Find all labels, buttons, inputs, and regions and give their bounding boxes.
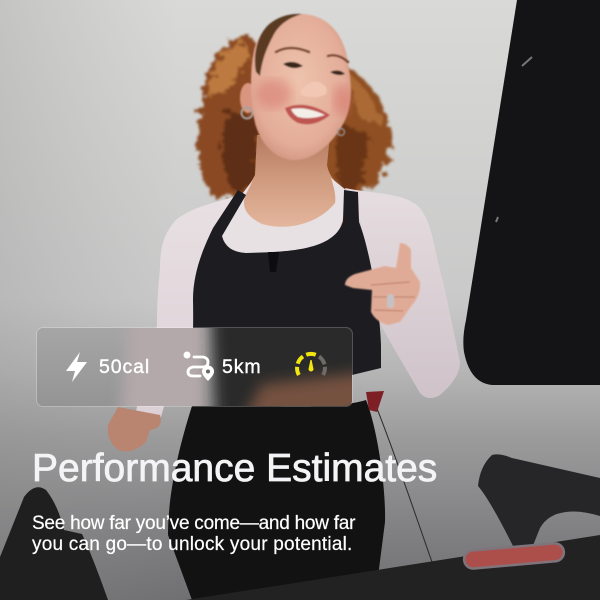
runner	[108, 14, 460, 600]
teeth	[291, 108, 325, 118]
red button	[463, 543, 565, 569]
top zipper pull	[268, 252, 279, 272]
right earring	[338, 128, 344, 136]
right hand	[345, 243, 420, 325]
leggings	[168, 400, 385, 600]
subtitle	[32, 512, 356, 555]
treadmill deck	[186, 535, 600, 600]
eyebrows	[276, 48, 348, 62]
treadmill left console	[0, 487, 108, 600]
treadmill right handle	[478, 454, 600, 548]
neck and chest	[240, 135, 348, 232]
icon: performance gauge	[297, 354, 325, 375]
nose	[301, 81, 327, 97]
slicked hair	[255, 14, 302, 76]
right arm	[345, 188, 460, 398]
right cheek blush	[333, 85, 351, 115]
ear	[240, 83, 256, 113]
title: Performance Estimates	[32, 447, 437, 490]
icon: lightning bolt	[66, 352, 87, 382]
earphone cable	[372, 396, 432, 562]
left cheek blush	[256, 79, 292, 109]
subtitle: See how far you’ve come—and how far	[32, 512, 355, 534]
stat: calories: 50cal	[99, 356, 150, 378]
icon: route with pin	[184, 352, 214, 381]
left hand	[108, 407, 161, 451]
hand and fingers	[345, 243, 420, 325]
subtitle: you can go—to unlock your potential.	[32, 534, 353, 555]
stats panel	[36, 327, 353, 407]
earring	[242, 108, 252, 118]
hair	[197, 36, 391, 198]
head	[240, 14, 351, 160]
treadmill screen	[463, 0, 600, 385]
black tank top	[192, 190, 381, 405]
ring	[387, 294, 394, 308]
left arm	[135, 195, 242, 420]
clip	[366, 391, 384, 412]
face	[251, 14, 351, 160]
eyes	[283, 62, 345, 75]
stat: distance: 5km	[222, 356, 262, 378]
finger creases	[371, 282, 415, 311]
mouth	[285, 105, 330, 124]
white undershirt	[222, 178, 346, 253]
